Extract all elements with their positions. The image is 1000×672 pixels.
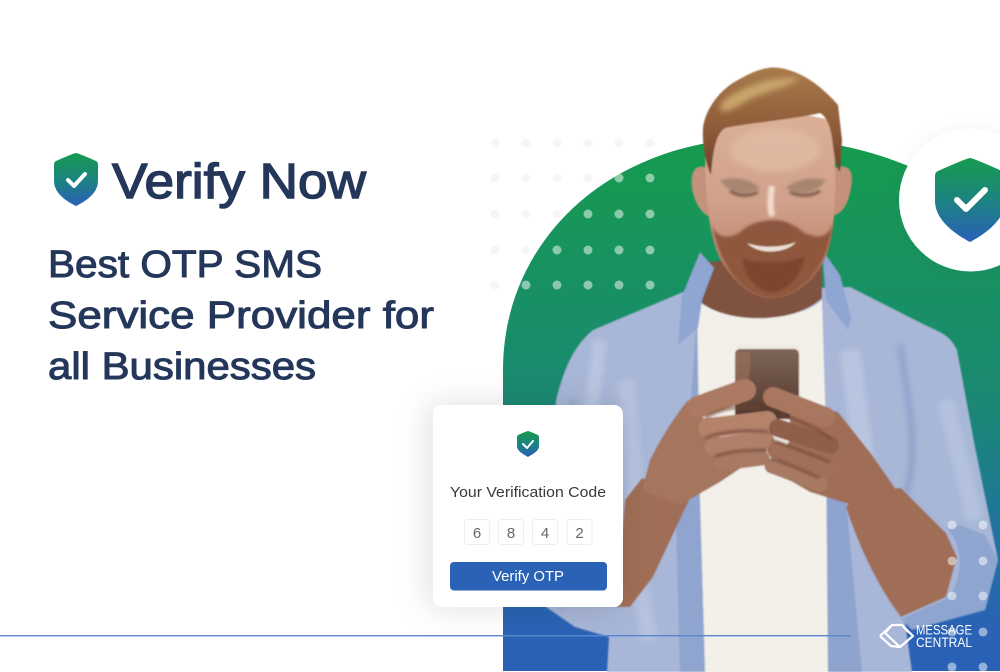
brand logo: Message Central xyxy=(880,622,972,650)
headline: all Businesses xyxy=(48,346,316,388)
collar xyxy=(678,252,851,345)
logo: shield icon xyxy=(54,153,98,206)
brand logo: Message Central: CENTRAL xyxy=(916,635,972,650)
face xyxy=(705,108,835,298)
code boxes: 6 xyxy=(473,525,481,542)
code boxes: 4 xyxy=(541,525,549,542)
code boxes: 8 xyxy=(507,525,515,542)
hair xyxy=(703,68,842,175)
bottom rule xyxy=(0,635,851,636)
verify button: Verify OTP xyxy=(492,569,564,585)
rolled sleeve xyxy=(901,525,998,630)
white circle badge with shield xyxy=(899,128,1000,272)
code boxes: 2 xyxy=(575,525,584,542)
code boxes xyxy=(464,520,592,544)
eyes xyxy=(720,178,826,195)
logo: Verify Now: Verify Now xyxy=(112,155,367,209)
left forearm xyxy=(616,478,690,607)
headline: Service Provider for xyxy=(48,295,434,337)
beard xyxy=(712,222,833,298)
shirt xyxy=(546,287,998,672)
right dot column xyxy=(948,520,988,672)
white tee xyxy=(697,300,828,672)
green to blue arch shape xyxy=(503,138,1000,671)
nose xyxy=(754,186,792,232)
right forearm xyxy=(846,488,957,617)
brand logo: Message Central: MESSAGE xyxy=(916,622,972,638)
dot grid xyxy=(490,138,654,290)
card title: Your Verification Code xyxy=(450,485,606,501)
neck xyxy=(697,255,822,318)
hands xyxy=(642,390,895,505)
icon: brand mark xyxy=(880,625,913,647)
verify button xyxy=(450,562,607,590)
forehead glow xyxy=(730,128,820,172)
headline: Best OTP SMS xyxy=(48,244,322,286)
icon: card shield xyxy=(517,431,539,457)
photo: man using phone xyxy=(546,68,998,672)
headline xyxy=(48,244,434,388)
verification card xyxy=(433,405,623,607)
icon: large shield xyxy=(935,158,1000,242)
mouth xyxy=(747,242,796,252)
head xyxy=(692,68,852,298)
phone xyxy=(735,345,800,419)
placket xyxy=(676,318,705,672)
ears xyxy=(692,167,712,218)
